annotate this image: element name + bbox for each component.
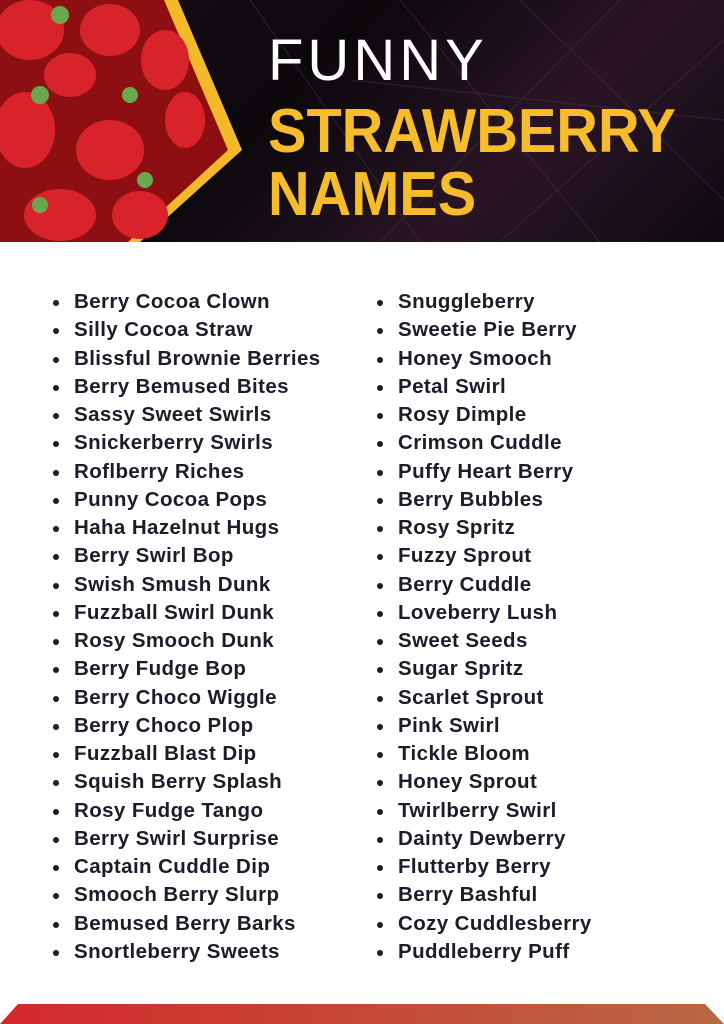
list: right column: Honey Smooch xyxy=(398,346,552,370)
list: right column: Sweet Seeds xyxy=(398,629,528,652)
list: left column xyxy=(53,290,321,963)
list: left column: Smooch Berry Slurp xyxy=(74,883,279,906)
title line 2: STRAWBERRY xyxy=(268,97,676,166)
list: right column: Pink Swirl xyxy=(398,714,500,737)
list: right column: Flutterby Berry xyxy=(398,855,551,878)
list: right column: Sweetie Pie Berry xyxy=(398,318,577,341)
list: left column: Punny Cocoa Pops xyxy=(74,488,267,511)
list: left column: Snickerberry Swirls xyxy=(74,431,273,454)
list: left column: Swish Smush Dunk xyxy=(74,572,271,596)
list: left column: Fuzzball Blast Dip xyxy=(74,742,257,765)
list: right column: Berry Cuddle xyxy=(398,572,532,596)
list: right column: Petal Swirl xyxy=(398,375,506,398)
list: right column: Scarlet Sprout xyxy=(398,686,544,708)
footer bar xyxy=(0,1004,724,1024)
list: left column: Berry Bemused Bites xyxy=(74,375,289,398)
list: left column: Sassy Sweet Swirls xyxy=(74,403,272,426)
list: right column: Rosy Dimple xyxy=(398,403,527,426)
list: right column: Cozy Cuddlesberry xyxy=(398,912,592,934)
list: left column: Berry Choco Wiggle xyxy=(74,686,277,708)
list: left column: Berry Choco Plop xyxy=(74,714,254,737)
list: left column: Bemused Berry Barks xyxy=(74,912,296,934)
list: left column: Berry Cocoa Clown xyxy=(74,290,270,313)
title line 3: NAMES xyxy=(268,160,476,229)
background pattern and strawberry photo xyxy=(0,0,724,242)
list: left column: Silly Cocoa Straw xyxy=(74,318,253,341)
list: left column: Captain Cuddle Dip xyxy=(74,855,270,878)
list: left column: Squish Berry Splash xyxy=(74,770,282,793)
list: left column: Haha Hazelnut Hugs xyxy=(74,516,279,539)
list: left column: Snortleberry Sweets xyxy=(74,940,280,963)
list: right column: Loveberry Lush xyxy=(398,601,557,624)
list: left column: Berry Swirl Bop xyxy=(74,544,234,567)
list: right column: Berry Bashful xyxy=(398,883,538,906)
list: right column: Tickle Bloom xyxy=(398,742,530,765)
list: right column: Fuzzy Sprout xyxy=(398,544,532,567)
title line 1: FUNNY xyxy=(268,28,488,93)
header banner xyxy=(0,0,724,242)
list: left column: Berry Swirl Surprise xyxy=(74,827,279,850)
list: right column: Puddleberry Puff xyxy=(398,940,570,963)
list: left column: Roflberry Riches xyxy=(74,460,244,482)
list: left column: Berry Fudge Bop xyxy=(74,657,246,680)
list: right column: Dainty Dewberry xyxy=(398,827,566,850)
list: right column: Sugar Spritz xyxy=(398,657,524,680)
list: right column: Honey Sprout xyxy=(398,770,537,793)
list: left column: Rosy Fudge Tango xyxy=(74,798,263,822)
list: right column: Rosy Spritz xyxy=(398,516,515,539)
list: left column: Fuzzball Swirl Dunk xyxy=(74,601,274,624)
list: left column: Blissful Brownie Berries xyxy=(74,346,321,370)
list: right column: Twirlberry Swirl xyxy=(398,798,557,822)
list: right column: Snuggleberry xyxy=(398,290,535,313)
list: left column: Rosy Smooch Dunk xyxy=(74,629,274,652)
list: right column xyxy=(377,290,592,963)
list: right column: Puffy Heart Berry xyxy=(398,460,573,482)
list: right column: Berry Bubbles xyxy=(398,488,543,511)
list: right column: Crimson Cuddle xyxy=(398,431,562,454)
